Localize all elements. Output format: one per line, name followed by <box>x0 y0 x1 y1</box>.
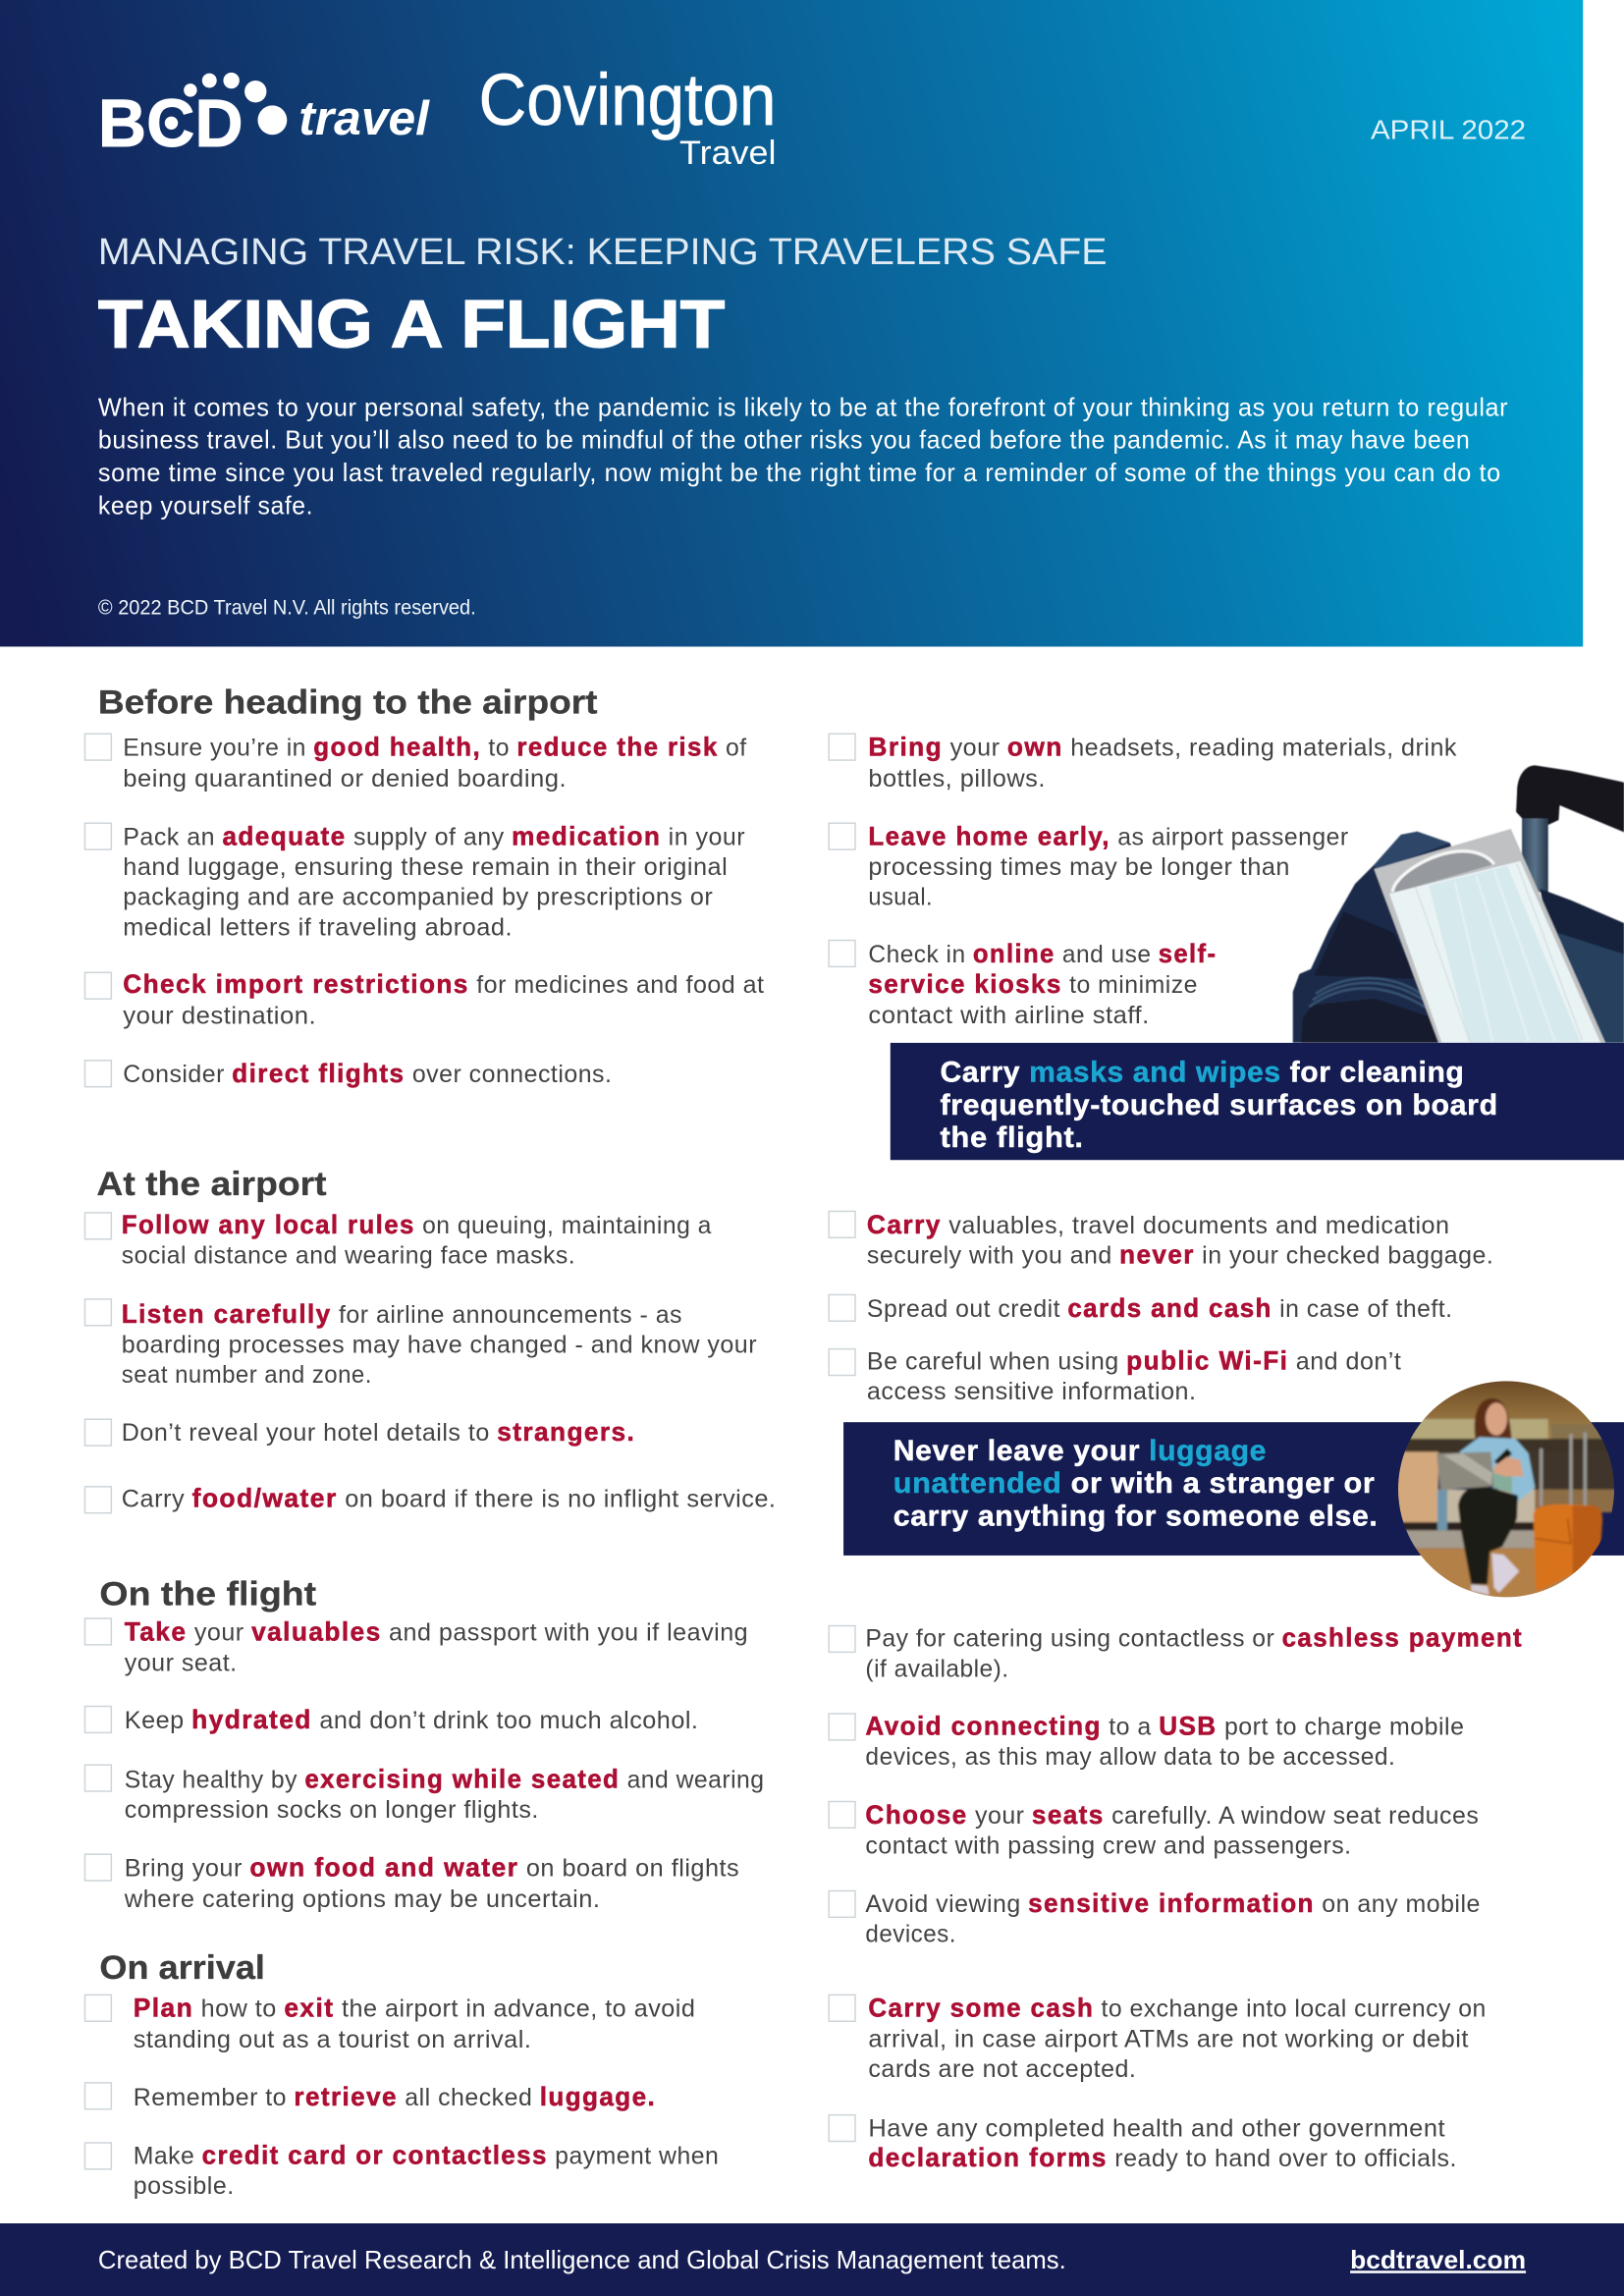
item: own food <box>85 1853 739 1913</box>
item: leave early <box>829 822 1349 911</box>
footer <box>0 2223 1624 2296</box>
item: leave early: Leave home early, as airport passenger <box>868 822 1349 851</box>
panel: on arrival, right column <box>829 1994 1487 2172</box>
intro paragraph: keep yourself safe. <box>98 492 313 519</box>
panel: at the airport <box>85 1166 776 1513</box>
item: medication <box>85 822 745 941</box>
heading: On arrival <box>99 1949 265 1987</box>
callout: never leave luggage: carry anything for someone else. <box>893 1500 1378 1532</box>
item: declaration forms: declaration forms ready to hand over to officials. <box>868 2143 1457 2172</box>
item: good health <box>85 733 747 793</box>
item: USB: devices, as this may allow data to be accessed. <box>865 1743 1395 1771</box>
item: own food: where catering options may be uncertain. <box>124 1886 600 1913</box>
item: check in online <box>829 939 1217 1029</box>
item: local rules <box>85 1210 712 1269</box>
callout: never leave luggage: unattended or with a stranger or <box>893 1467 1375 1500</box>
item: listen carefully <box>85 1299 757 1389</box>
callout: never leave luggage: Never leave your luggage <box>893 1435 1267 1467</box>
footer website: bcdtravel.com <box>1350 2247 1526 2274</box>
item: carry cash: Carry some cash to exchange into local currency on <box>868 1994 1487 2023</box>
item: public wifi: Be careful when using public Wi-Fi and don’t <box>867 1346 1401 1376</box>
item: carry valuables <box>829 1210 1493 1269</box>
item: credit card: Make credit card or contactless payment when <box>134 2141 719 2170</box>
panel: on arrival <box>85 1949 719 2200</box>
intro paragraph: business travel. But you’ll also need to be mindful of the other risks you faced before the pandemic. As it may have been <box>98 426 1470 454</box>
photo: suitcase with face mask <box>1293 765 1624 1043</box>
item: carry cash: arrival, in case airport ATMs are not working or debit <box>868 2025 1469 2052</box>
item: carry valuables: Carry valuables, travel documents and medication <box>867 1210 1450 1239</box>
item: local rules: Follow any local rules on queuing, maintaining a <box>122 1210 712 1239</box>
item: direct flights: Consider direct flights over connections. <box>123 1059 612 1088</box>
item: import restrictions: your destination. <box>123 1003 316 1030</box>
copyright: © 2022 BCD Travel N.V. All rights reserved. <box>98 597 476 620</box>
item: retrieve luggage: Remember to retrieve all checked luggage. <box>134 2082 656 2111</box>
item: medication: packaging and are accompanied by prescriptions or <box>123 884 713 911</box>
item: seats <box>829 1800 1479 1859</box>
panel: on the flight, right column <box>829 1622 1523 1948</box>
date: APRIL 2022 <box>1371 115 1526 145</box>
logo: Covington Travel: Covington <box>479 58 776 140</box>
intro paragraph: some time since you last traveled regularly, now might be the right time for a reminder of some of the things you can do to <box>98 460 1501 487</box>
item: USB <box>829 1712 1464 1771</box>
item: exercising: Stay healthy by exercising while seated and wearing <box>125 1764 765 1793</box>
item: public wifi: access sensitive information. <box>867 1378 1197 1405</box>
item: sensitive information: devices. <box>865 1921 956 1948</box>
heading: On the flight <box>99 1576 316 1613</box>
item: declaration forms <box>829 2114 1457 2172</box>
item: credit card: possible. <box>134 2172 235 2200</box>
photo: traveler with laptop and orange suitcase <box>1398 1381 1614 1597</box>
item: import restrictions: Check import restrictions for medicines and food at <box>123 969 765 999</box>
title: TAKING A FLIGHT <box>98 286 725 361</box>
heading: Before heading to the airport <box>98 683 598 721</box>
intro paragraph <box>98 395 1508 519</box>
item: carry cash <box>829 1994 1487 2083</box>
subtitle: MANAGING TRAVEL RISK: KEEPING TRAVELERS SAFE <box>98 232 1108 273</box>
item: leave early: processing times may be longer than <box>868 853 1290 881</box>
panel: before heading, right column <box>829 733 1457 1029</box>
item: check in online: Check in online and use self- <box>868 939 1217 968</box>
item: listen carefully: boarding processes may have changed - and know your <box>122 1331 757 1358</box>
item: food and water: Carry food/water on board if there is no inflight service. <box>122 1484 776 1513</box>
item: cashless payment: Pay for catering using contactless or cashless payment <box>865 1622 1523 1652</box>
item: valuables: Take your valuables and passport with you if leaving <box>125 1616 748 1646</box>
panel: on the flight <box>85 1576 765 1913</box>
callout: never leave luggage <box>843 1422 1624 1556</box>
item: listen carefully: Listen carefully for airline announcements - as <box>122 1299 682 1329</box>
item: declaration forms: Have any completed health and other government <box>868 2114 1445 2142</box>
panel: at the airport, right column <box>829 1210 1493 1405</box>
item: medication: medical letters if traveling abroad. <box>123 913 513 941</box>
callout: masks and wipes <box>891 1043 1624 1160</box>
item: cashless payment <box>829 1622 1523 1683</box>
item: leave early: usual. <box>868 884 933 911</box>
logo: BCD travel: travel <box>298 91 430 145</box>
item: medication: Pack an adequate supply of any medication in your <box>123 822 745 851</box>
item: listen carefully: seat number and zone. <box>122 1361 372 1389</box>
item: public wifi <box>829 1346 1401 1405</box>
heading: At the airport <box>96 1166 327 1203</box>
item: credit card <box>85 2141 719 2200</box>
item: plan exit: standing out as a tourist on arrival. <box>134 2026 531 2053</box>
item: bring your own <box>829 733 1457 793</box>
item: carry valuables: securely with you and never in your checked baggage. <box>867 1239 1493 1269</box>
item: plan exit: Plan how to exit the airport in advance, to avoid <box>134 1994 695 2023</box>
panel: header <box>0 0 1583 646</box>
item: exercising: compression socks on longer flights. <box>125 1796 539 1824</box>
item: import restrictions <box>85 969 765 1030</box>
callout: masks and wipes: Carry masks and wipes for cleaning <box>941 1056 1464 1088</box>
callout: masks and wipes: the flight. <box>941 1121 1084 1154</box>
logo: BCD travel <box>98 73 430 161</box>
item: bring your own: Bring your own headsets, reading materials, drink <box>868 733 1457 762</box>
item: carry cash: cards are not accepted. <box>868 2055 1136 2083</box>
item: cashless payment: (if available). <box>865 1656 1009 1683</box>
item: sensitive information: Avoid viewing sensitive information on any mobile <box>865 1888 1481 1918</box>
item: bring your own: bottles, pillows. <box>868 765 1046 793</box>
item: own food: Bring your own food and water on board on flights <box>125 1853 739 1883</box>
logo: Covington Travel: Travel <box>679 135 776 172</box>
item: valuables: your seat. <box>125 1650 238 1677</box>
panel: before heading to the airport <box>85 683 765 1088</box>
item: plan exit <box>85 1994 695 2053</box>
item: exercising <box>85 1764 765 1824</box>
logo: Covington Travel <box>479 58 776 172</box>
item: good health: Ensure you’re in good health, to reduce the risk of <box>123 733 747 762</box>
item: hydrated: Keep hydrated and don’t drink too much alcohol. <box>125 1705 698 1734</box>
item: check in online: service kiosks to minimize <box>868 969 1198 999</box>
item: medication: hand luggage, ensuring these remain in their original <box>123 853 728 881</box>
item: check in online: contact with airline staff. <box>868 1002 1150 1029</box>
item: sensitive information <box>829 1888 1481 1948</box>
item: seats: contact with passing crew and passengers. <box>865 1831 1352 1859</box>
item: good health: being quarantined or denied boarding. <box>123 765 567 793</box>
item: cards and cash: Spread out credit cards and cash in case of theft. <box>867 1293 1453 1323</box>
logo: BCD travel: BCD <box>98 85 244 161</box>
item: local rules: social distance and wearing face masks. <box>122 1241 575 1269</box>
item: strangers: Don’t reveal your hotel details to strangers. <box>122 1417 635 1447</box>
callout: masks and wipes: frequently-touched surfaces on board <box>941 1089 1498 1121</box>
item: valuables <box>85 1616 748 1677</box>
footer credit: Created by BCD Travel Research & Intelligence and Global Crisis Management teams. <box>98 2247 1066 2274</box>
item: seats: Choose your seats carefully. A window seat reduces <box>865 1800 1479 1830</box>
item: USB: Avoid connecting to a USB port to charge mobile <box>865 1712 1464 1741</box>
intro paragraph: When it comes to your personal safety, the pandemic is likely to be at the forefront of your thinking as you return to regular <box>98 395 1508 422</box>
